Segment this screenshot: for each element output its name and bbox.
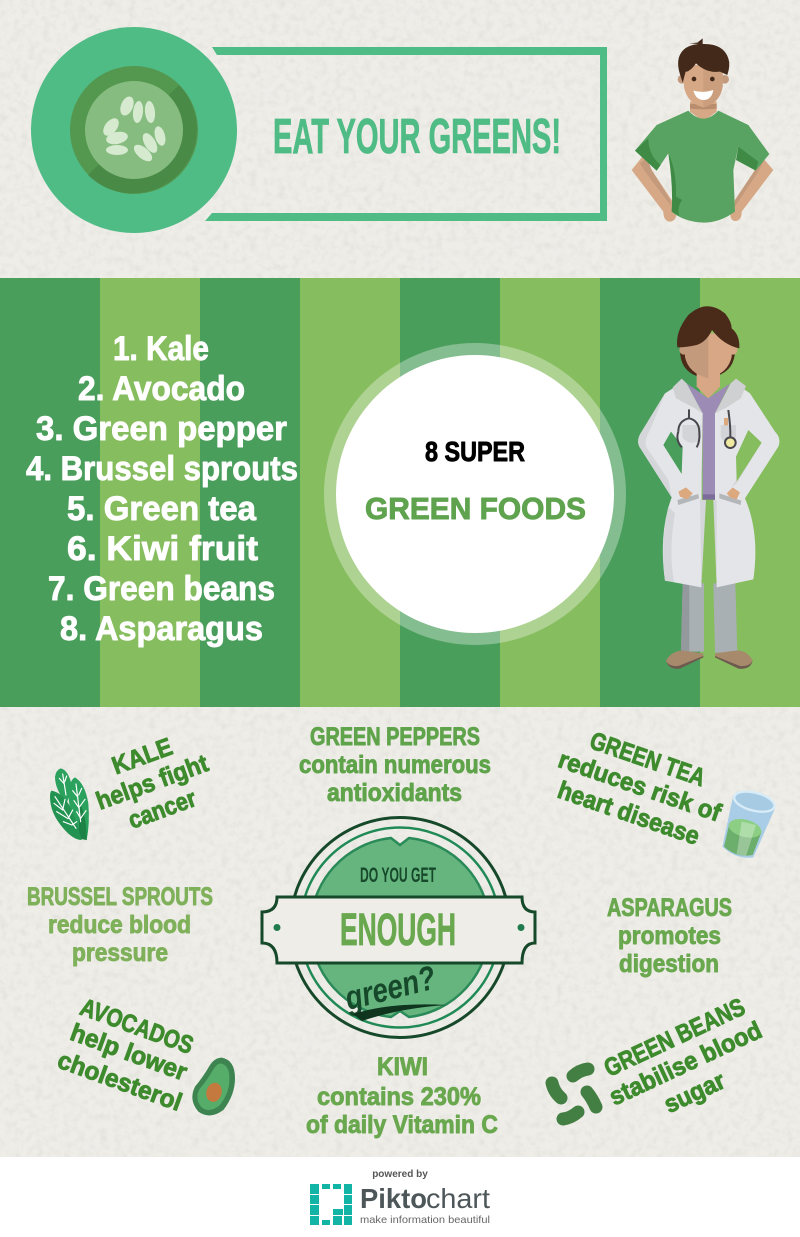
icon: green beans <box>552 1069 596 1119</box>
text: green tea: GREEN TEA <box>586 727 709 792</box>
text: asparagus: ASPARAGUS <box>607 894 732 922</box>
header panel <box>31 27 773 233</box>
text: brussel sprouts <box>27 883 213 967</box>
logo wordmark <box>360 1183 490 1226</box>
title frame <box>205 47 607 221</box>
list of foods: 5. Green tea <box>67 490 257 528</box>
text: kiwi: contains 230% <box>317 1083 481 1111</box>
text: avocados: AVOCADOS <box>77 993 197 1060</box>
list of foods: 1. Kale <box>113 330 209 368</box>
text: kiwi: of daily Vitamin C <box>306 1111 498 1139</box>
text: green peppers: GREEN PEPPERS <box>310 723 480 751</box>
striped panel: 8 super green foods <box>0 278 800 707</box>
text: avocados: cholesterol <box>54 1046 186 1117</box>
text: asparagus <box>607 894 732 978</box>
lab coat <box>638 382 779 587</box>
logo wordmark: chart <box>426 1183 490 1214</box>
icon: avocado <box>192 1058 235 1115</box>
text: avocados: help lower <box>67 1018 191 1087</box>
list of foods: 3. Green pepper <box>36 410 287 448</box>
title: EAT YOUR GREENS! <box>273 110 561 164</box>
text: green beans: sugar <box>660 1066 730 1119</box>
text: brussel sprouts: pressure <box>72 939 168 967</box>
text: green peppers: contain numerous <box>299 751 491 779</box>
badge: do you get enough green: ENOUGH <box>340 904 456 955</box>
logo wordmark: Pikto <box>360 1183 427 1214</box>
text: brussel sprouts: BRUSSEL SPROUTS <box>27 883 213 911</box>
centre circle: GREEN FOODS <box>365 491 586 526</box>
text: brussel sprouts: reduce blood <box>48 911 191 939</box>
centre circle: 8 SUPER <box>425 436 525 467</box>
list of foods <box>26 330 298 648</box>
footer: piktochart <box>0 1157 800 1237</box>
illustration: doctor <box>638 306 779 669</box>
list of foods: 2. Avocado <box>78 370 245 408</box>
text: green tea: reduces risk of <box>555 746 725 828</box>
text: kale: cancer <box>125 784 200 835</box>
text: green tea <box>554 727 725 851</box>
text: asparagus: promotes <box>618 922 721 950</box>
background stripes <box>0 278 800 707</box>
footer: piktochart: powered by <box>372 1169 428 1180</box>
text: asparagus: digestion <box>619 950 719 978</box>
icon: glass of green tea <box>722 788 777 858</box>
text: kiwi: KIWI <box>377 1053 428 1081</box>
badge: do you get enough green: DO YOU GET <box>360 864 436 887</box>
icon: cucumber slice <box>31 27 237 233</box>
list of foods: 8. Asparagus <box>60 610 263 648</box>
text: kale: KALE <box>108 733 176 780</box>
list of foods: 6. Kiwi fruit <box>67 530 258 568</box>
logo wordmark: make information beautiful <box>360 1214 490 1226</box>
text: kale: helps fight <box>93 749 213 816</box>
text: green peppers: antioxidants <box>327 779 462 807</box>
icon: piktochart logo <box>310 1184 352 1225</box>
text: green beans: GREEN BEANS <box>600 993 749 1083</box>
badge: do you get enough green <box>262 818 535 1038</box>
badge: do you get enough green: green? <box>340 959 440 1018</box>
section: food benefits <box>27 723 777 1139</box>
icon: kale leaves <box>50 768 89 840</box>
illustration: man in green shirt <box>632 38 773 223</box>
text: kale <box>93 733 213 835</box>
list of foods: 7. Green beans <box>48 570 275 608</box>
centre circle <box>324 343 626 645</box>
text: kiwi <box>306 1053 498 1139</box>
text: green beans: stabilise blood <box>605 1016 766 1111</box>
list of foods: 4. Brussel sprouts <box>26 450 298 488</box>
banner <box>262 897 535 963</box>
text: green peppers <box>299 723 491 807</box>
text: green tea: heart disease <box>554 776 703 851</box>
text: avocados <box>54 993 197 1117</box>
